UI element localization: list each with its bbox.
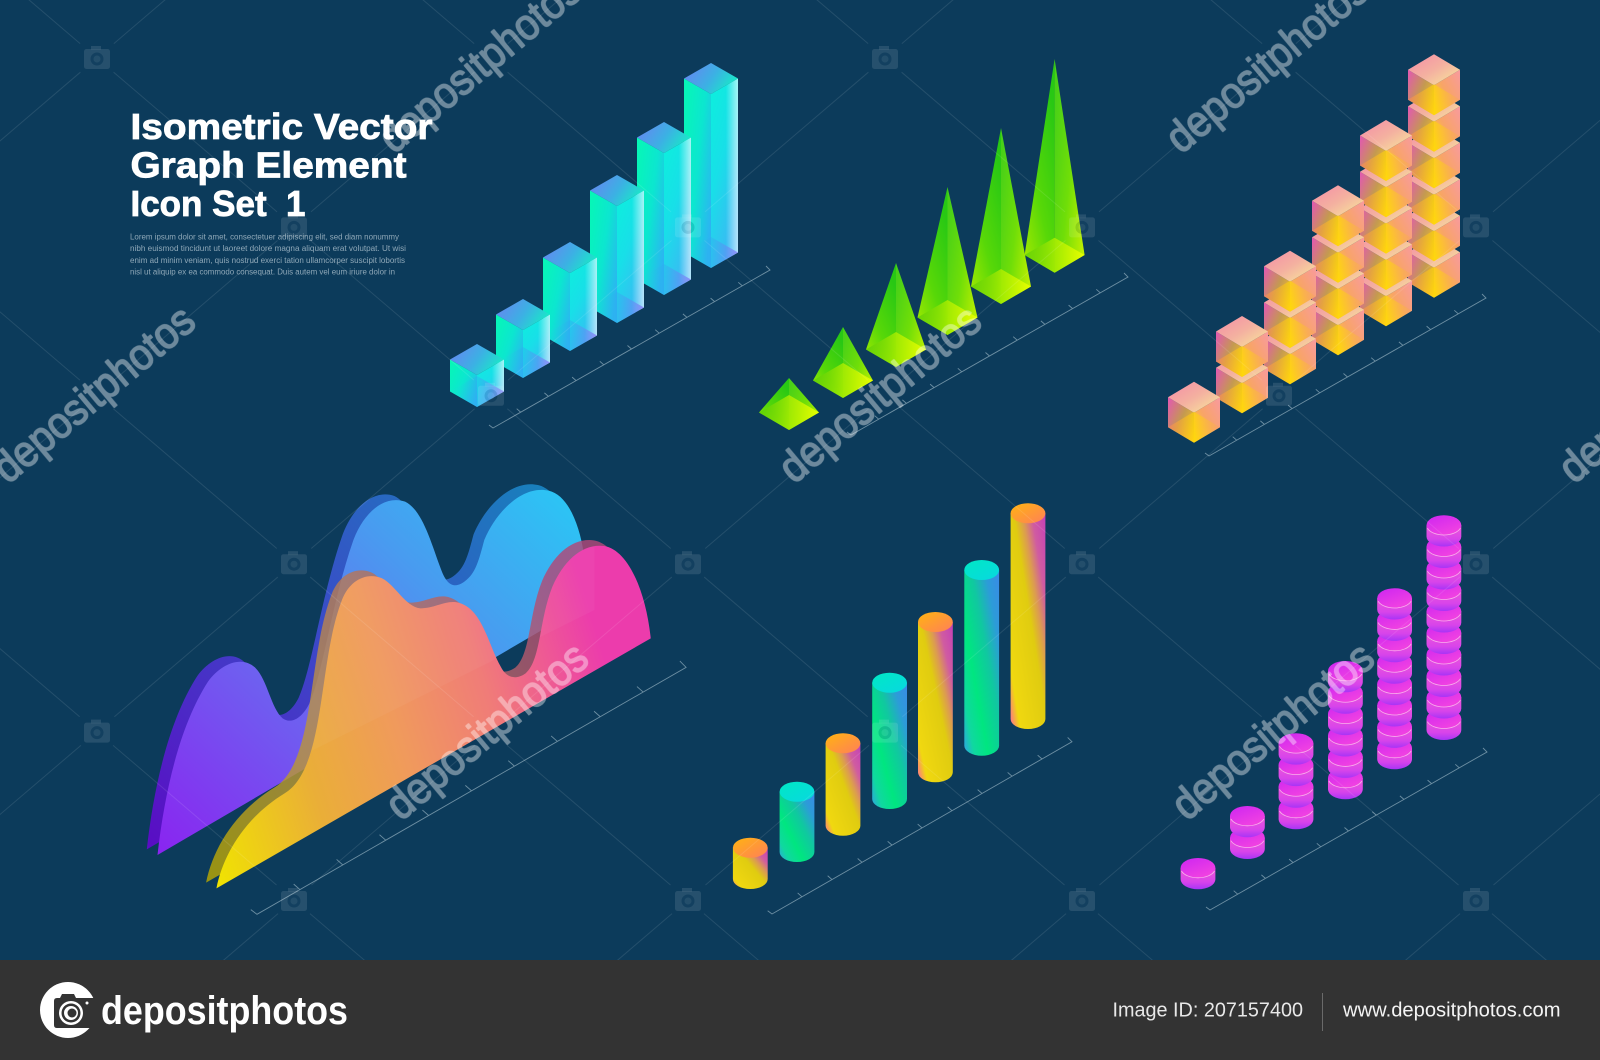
- chart: gradient cylinders: [733, 503, 1072, 914]
- title: Isometric Vector: [130, 106, 432, 147]
- description text: [130, 232, 406, 276]
- icon: footer camera logo: [40, 982, 96, 1038]
- footer bar: [0, 960, 1600, 1060]
- description text: enim ad minim veniam, quis nostrud exerci tation ullamcorper suscipit lobortis: [130, 256, 405, 265]
- footer image id: Image ID: 207157400: [1112, 1000, 1303, 1022]
- watermark text: depositphotos: [1162, 632, 1383, 829]
- chart: green isometric pyramids: [759, 59, 1128, 435]
- chart: orange stacked isometric blocks: [1168, 54, 1486, 456]
- watermark camera icons: [84, 46, 1489, 911]
- description text: nisl ut aliquip ex ea commodo consequat. Duis autem vel eum iriure dolor in: [130, 268, 395, 276]
- title: [130, 106, 432, 224]
- chart: layered area waves: [147, 484, 686, 914]
- watermark text: [0, 0, 1600, 829]
- description text: Lorem ipsum dolor sit amet, consectetuer adipiscing elit, sed diam nonummy: [130, 232, 399, 242]
- chart: teal isometric bars: [450, 63, 770, 428]
- title: Graph Element: [130, 144, 406, 186]
- footer website url: www.depositphotos.com: [1342, 1000, 1560, 1022]
- chart: magenta coin stacks: [1181, 515, 1487, 910]
- watermark text: depositphotos: [376, 632, 597, 829]
- description text: nibh euismod tincidunt ut laoreet dolore magna aliquam erat volutpat. Ut wisi: [130, 244, 406, 253]
- title: Icon Set 1: [130, 183, 306, 224]
- watermark text: depositphotos: [769, 295, 990, 492]
- footer brand name: depositphotos: [101, 989, 348, 1033]
